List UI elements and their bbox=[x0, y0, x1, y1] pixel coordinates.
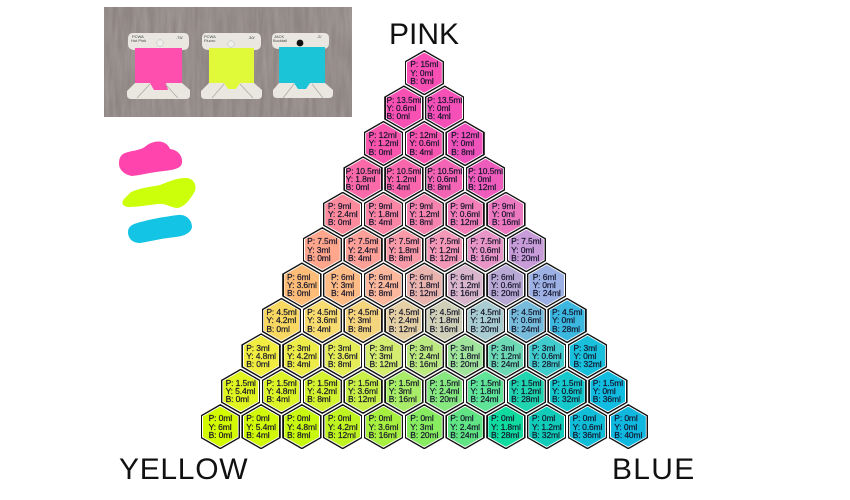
hexagon mixing triangle: Y: 1.8ml bbox=[470, 386, 500, 396]
swatches: painted pink, yellow and blue blobs bbox=[119, 142, 196, 243]
hexagon mixing triangle: P: 10.5ml bbox=[386, 166, 421, 176]
hexagon mixing triangle: B: 16ml bbox=[409, 359, 437, 369]
hexagon mixing triangle: P: 6ml bbox=[331, 272, 354, 282]
hex row 6 bbox=[303, 227, 342, 272]
hex row 11: P: 0ml bbox=[209, 413, 232, 423]
hexagon mixing triangle: P: 7.5ml bbox=[430, 236, 460, 246]
hexagon mixing triangle: B: 4ml bbox=[246, 430, 270, 440]
hex row 10: Y: 5.4ml bbox=[226, 386, 255, 396]
hexagon mixing triangle: B: 12ml bbox=[389, 324, 417, 334]
hexagon mixing triangle: Y: 1.8ml bbox=[369, 209, 398, 219]
hex row 9: P: 3ml bbox=[246, 343, 270, 353]
hexagon mixing triangle: B: 8ml bbox=[409, 217, 433, 227]
hexagon mixing triangle: Y: 3.6ml bbox=[328, 351, 358, 361]
hexagon mixing triangle: Y: 1.2ml bbox=[386, 174, 416, 184]
hex row 11: Y: 6ml bbox=[209, 422, 232, 432]
hexagon mixing triangle: B: 32ml bbox=[532, 430, 560, 440]
hexagon mixing triangle: B: 24ml bbox=[511, 324, 539, 334]
hex row 1 bbox=[405, 50, 444, 95]
hexagon mixing triangle: P: 9ml bbox=[369, 201, 392, 211]
hex row 5: Y: 2.4ml bbox=[328, 209, 358, 219]
hexagon mixing triangle: P: 7.5ml bbox=[389, 236, 419, 246]
hexagon mixing triangle: P: 1.5ml bbox=[307, 378, 337, 388]
hexagon mixing triangle: B: 8ml bbox=[427, 182, 451, 192]
hexagon mixing triangle: B: 16ml bbox=[389, 394, 417, 404]
hexagon mixing triangle: Y: 0ml bbox=[552, 315, 575, 325]
hexagon mixing triangle: P: 1.5ml bbox=[266, 378, 297, 388]
blue swatch bbox=[128, 215, 192, 243]
hexagon mixing triangle: B: 4ml bbox=[331, 288, 354, 298]
hex row 10: P: 1.5ml bbox=[226, 378, 256, 388]
hexagon mixing triangle: P: 0ml bbox=[614, 413, 638, 423]
hexagon mixing triangle: Y: 0ml bbox=[492, 209, 515, 219]
hexagon mixing triangle: B: 24ml bbox=[491, 359, 519, 369]
hexagon mixing triangle: P: 9ml bbox=[492, 201, 515, 211]
hexagon mixing triangle: B: 28ml bbox=[491, 430, 519, 440]
hex row 4: B: 0ml bbox=[346, 182, 369, 192]
hexagon mixing triangle: Y: 3ml bbox=[370, 351, 392, 361]
hexagon mixing triangle: Y: 0.6ml bbox=[552, 386, 582, 396]
hex row 4: P: 10.5ml bbox=[346, 166, 380, 176]
hexagon mixing triangle: P: 3ml bbox=[287, 343, 310, 353]
hexagon mixing triangle: Y: 1.2ml bbox=[532, 422, 562, 432]
hex row 1: B: 0ml bbox=[410, 76, 434, 86]
heading: blue: BLUE bbox=[612, 453, 696, 486]
hex row 3: B: 0ml bbox=[369, 147, 392, 157]
hexagon mixing triangle: Y: 0.6ml bbox=[511, 315, 541, 325]
hexagon mixing triangle: B: 20ml bbox=[491, 288, 519, 298]
hex row 4: Y: 1.8ml bbox=[346, 174, 375, 184]
hex row 6: Y: 3ml bbox=[307, 245, 330, 255]
hexagon mixing triangle: Y: 3ml bbox=[348, 315, 371, 325]
hexagon mixing triangle bbox=[201, 50, 648, 449]
heading: yellow: YELLOW bbox=[119, 453, 248, 486]
hex row 5: B: 0ml bbox=[328, 217, 351, 227]
hexagon mixing triangle: Y: 0.6ml bbox=[409, 138, 439, 148]
hexagon mixing triangle: B: 8ml bbox=[451, 147, 474, 157]
hexagon mixing triangle: Y: 4.8ml bbox=[266, 386, 296, 396]
hexagon mixing triangle: P: 6ml bbox=[450, 272, 474, 282]
hex row 1: Y: 0ml bbox=[410, 68, 433, 78]
hexagon mixing triangle: P: 0ml bbox=[491, 413, 514, 423]
hex row 9: B: 0ml bbox=[246, 359, 270, 369]
hexagon mixing triangle: B: 8ml bbox=[389, 253, 412, 263]
hexagon mixing triangle: Y: 4.8ml bbox=[287, 422, 317, 432]
hexagon mixing triangle: B: 8ml bbox=[369, 288, 392, 298]
hex row 1: P: 15ml bbox=[410, 59, 438, 69]
photo: three spools of fluorescent thread: Fluoro bbox=[204, 38, 216, 43]
hexagon mixing triangle: B: 4ml bbox=[266, 394, 290, 404]
hexagon mixing triangle: B: 4ml bbox=[307, 324, 331, 334]
hexagon mixing triangle: P: 4.5ml bbox=[552, 307, 582, 317]
hex row 7: P: 6ml bbox=[287, 272, 310, 282]
hexagon mixing triangle: Y: 2.4ml bbox=[450, 422, 480, 432]
hexagon mixing triangle: Y: 0ml bbox=[468, 174, 491, 184]
hex row 2: B: 0ml bbox=[386, 111, 410, 121]
hexagon mixing triangle: P: 1.5ml bbox=[389, 378, 419, 388]
hexagon mixing triangle: B: 24ml bbox=[470, 394, 498, 404]
hexagon mixing triangle: P: 3ml bbox=[409, 343, 433, 353]
hex row 11 bbox=[201, 404, 240, 449]
hexagon mixing triangle: Y: 4.2ml bbox=[328, 422, 358, 432]
hexagon mixing triangle: B: 4ml bbox=[427, 111, 451, 121]
photo: three spools of fluorescent thread: Hot Pink bbox=[131, 38, 146, 43]
hexagon mixing triangle: P: 0ml bbox=[410, 413, 434, 423]
hexagon mixing triangle: P: 1.5ml bbox=[552, 378, 582, 388]
hexagon mixing triangle: Y: 1.2ml bbox=[409, 209, 439, 219]
hexagon mixing triangle: P: 12ml bbox=[409, 130, 437, 140]
hexagon mixing triangle: P: 7.5ml bbox=[511, 236, 541, 246]
hex row 8: Y: 4.2ml bbox=[266, 315, 296, 325]
hexagon mixing triangle: P: 6ml bbox=[533, 272, 556, 282]
hexagon mixing triangle: Y: 0.6ml bbox=[427, 174, 457, 184]
hexagon mixing triangle: B: 4ml bbox=[409, 147, 433, 157]
hexagon mixing triangle: P: 1.5ml bbox=[593, 378, 623, 388]
hexagon mixing triangle: P: 1.5ml bbox=[430, 378, 460, 388]
hexagon mixing triangle: B: 24ml bbox=[450, 430, 478, 440]
hexagon mixing triangle: P: 6ml bbox=[491, 272, 514, 282]
hexagon mixing triangle: P: 4.5ml bbox=[511, 307, 541, 317]
hexagon mixing triangle: B: 16ml bbox=[369, 430, 397, 440]
hexagon mixing triangle: B: 24ml bbox=[533, 288, 561, 298]
hexagon mixing triangle: P: 9ml bbox=[409, 201, 433, 211]
hexagon mixing triangle: P: 3ml bbox=[450, 343, 474, 353]
hexagon mixing triangle: Y: 0.6ml bbox=[470, 245, 500, 255]
photo: three spools of fluorescent thread: .75/ bbox=[176, 35, 184, 40]
hexagon mixing triangle: Y: 1.8ml bbox=[430, 315, 459, 325]
hexagon mixing triangle: B: 28ml bbox=[552, 324, 580, 334]
hexagon mixing triangle: Y: 3ml bbox=[331, 280, 354, 290]
hexagon mixing triangle: B: 16ml bbox=[430, 324, 458, 334]
hexagon mixing triangle: B: 32ml bbox=[552, 394, 580, 404]
hexagon mixing triangle: P: 0ml bbox=[328, 413, 351, 423]
photo: three spools of fluorescent thread: PCWA bbox=[132, 34, 144, 39]
hexagon mixing triangle: P: 4.5ml bbox=[430, 307, 460, 317]
hexagon mixing triangle: B: 8ml bbox=[328, 359, 351, 369]
hexagon mixing triangle: Y: 2.4ml bbox=[369, 280, 398, 290]
hexagon mixing triangle: Y: 1.8ml bbox=[409, 280, 439, 290]
hexagon mixing triangle: B: 12ml bbox=[468, 182, 496, 192]
hexagon mixing triangle: B: 16ml bbox=[470, 253, 498, 263]
hexagon mixing triangle: P: 0ml bbox=[532, 413, 555, 423]
hex row 3: P: 12ml bbox=[369, 130, 397, 140]
hex row 10 bbox=[221, 369, 260, 414]
hexagon mixing triangle: Y: 1.2ml bbox=[511, 386, 541, 396]
hexagon mixing triangle: B: 16ml bbox=[450, 288, 478, 298]
hexagon mixing triangle: P: 1.5ml bbox=[470, 378, 501, 388]
hexagon mixing triangle: P: 1.5ml bbox=[348, 378, 378, 388]
hexagon mixing triangle: B: 36ml bbox=[593, 394, 621, 404]
hexagon mixing triangle: Y: 1.8ml bbox=[491, 422, 521, 432]
hexagon mixing triangle: Y: 5.4ml bbox=[246, 422, 276, 432]
photo: three spools of fluorescent thread: Bucktail bbox=[273, 38, 287, 43]
hex row 11: B: 0ml bbox=[209, 430, 232, 440]
hex row 2: P: 13.5ml bbox=[386, 95, 421, 105]
hexagon mixing triangle: P: 6ml bbox=[409, 272, 433, 282]
hexagon mixing triangle: Y: 1.2ml bbox=[450, 280, 480, 290]
hexagon mixing triangle: B: 20ml bbox=[470, 324, 498, 334]
hexagon mixing triangle: Y: 3ml bbox=[389, 386, 412, 396]
hexagon mixing triangle: P: 4.5ml bbox=[348, 307, 378, 317]
hexagon mixing triangle: Y: 0ml bbox=[451, 138, 474, 148]
hexagon mixing triangle: Y: 0.6ml bbox=[532, 351, 562, 361]
hexagon mixing triangle: Y: 4.2ml bbox=[287, 351, 317, 361]
hex row 3: Y: 1.2ml bbox=[369, 138, 398, 148]
hexagon mixing triangle: B: 8ml bbox=[348, 324, 371, 334]
yellow swatch bbox=[122, 178, 196, 208]
hexagon mixing triangle: Y: 2.4ml bbox=[389, 315, 419, 325]
hexagon mixing triangle: Y: 3.6ml bbox=[369, 422, 398, 432]
hexagon mixing triangle: Y: 3.6ml bbox=[307, 315, 337, 325]
hexagon mixing triangle: Y: 0ml bbox=[593, 386, 616, 396]
hex row 7 bbox=[282, 262, 322, 308]
hex row 5 bbox=[323, 192, 362, 237]
hexagon mixing triangle: B: 8ml bbox=[287, 430, 310, 440]
hexagon mixing triangle: Y: 2.4ml bbox=[348, 245, 378, 255]
hexagon mixing triangle: Y: 3.6ml bbox=[348, 386, 378, 396]
hexagon mixing triangle: P: 7.5ml bbox=[470, 236, 501, 246]
hexagon mixing triangle: P: 0ml bbox=[246, 413, 270, 423]
hexagon mixing triangle: B: 12ml bbox=[430, 253, 458, 263]
hexagon mixing triangle: Y: 0.6ml bbox=[573, 422, 602, 432]
hexagon mixing triangle: B: 40ml bbox=[614, 430, 642, 440]
hexagon mixing triangle: Y: 1.2ml bbox=[470, 315, 500, 325]
hexagon mixing triangle: B: 16ml bbox=[492, 217, 520, 227]
photo: three spools of fluorescent thread bbox=[104, 7, 352, 117]
hexagon mixing triangle: Y: 0ml bbox=[511, 245, 534, 255]
hexagon mixing triangle: P: 0ml bbox=[450, 413, 474, 423]
hexagon mixing triangle: Y: 0.6ml bbox=[450, 209, 480, 219]
hexagon mixing triangle: B: 20ml bbox=[410, 430, 438, 440]
hexagon mixing triangle: Y: 1.2ml bbox=[491, 351, 521, 361]
photo: three spools of fluorescent thread: .30/ bbox=[248, 35, 256, 40]
hexagon mixing triangle: P: 0ml bbox=[573, 413, 596, 423]
photo: three spools of fluorescent thread: PCWA bbox=[204, 34, 216, 39]
hex row 8 bbox=[262, 298, 301, 343]
hexagon mixing triangle: P: 0ml bbox=[369, 413, 392, 423]
hexagon mixing triangle: P: 3ml bbox=[491, 343, 514, 353]
hexagon mixing triangle: Y: 2.4ml bbox=[430, 386, 459, 396]
hexagon mixing triangle: P: 4.5ml bbox=[307, 307, 337, 317]
hexagon mixing triangle: P: 3ml bbox=[574, 343, 597, 353]
hexagon mixing triangle: P: 1.5ml bbox=[511, 378, 541, 388]
hexagon mixing triangle: B: 32ml bbox=[574, 359, 601, 369]
hex row 6: P: 7.5ml bbox=[307, 236, 337, 246]
hexagon mixing triangle: P: 3ml bbox=[532, 343, 555, 353]
hexagon mixing triangle: P: 10.5ml bbox=[427, 166, 462, 176]
hexagon mixing triangle: B: 12ml bbox=[328, 430, 356, 440]
hexagon mixing triangle: P: 4.5ml bbox=[470, 307, 501, 317]
hexagon mixing triangle: Y: 3ml bbox=[410, 422, 433, 432]
hexagon mixing triangle: P: 13.5ml bbox=[427, 95, 462, 105]
hex row 10: B: 0ml bbox=[226, 394, 249, 404]
hexagon mixing triangle: B: 20ml bbox=[450, 359, 478, 369]
hex row 7: B: 0ml bbox=[287, 288, 310, 298]
hex row 7: Y: 3.6ml bbox=[287, 280, 317, 290]
hex row 9: Y: 4.8ml bbox=[246, 351, 276, 361]
hexagon mixing triangle: Y: 4.2ml bbox=[307, 386, 337, 396]
hexagon mixing triangle: Y: 0ml bbox=[427, 103, 450, 113]
hexagon mixing triangle: P: 9ml bbox=[450, 201, 474, 211]
hexagon mixing triangle: B: 20ml bbox=[430, 394, 458, 404]
hexagon mixing triangle: Y: 1.8ml bbox=[389, 245, 419, 255]
hex row 2 bbox=[384, 85, 424, 131]
hexagon mixing triangle: B: 28ml bbox=[532, 359, 560, 369]
hexagon mixing triangle: B: 12ml bbox=[370, 359, 397, 369]
hexagon mixing triangle: P: 6ml bbox=[369, 272, 392, 282]
hex row 8: B: 0ml bbox=[266, 324, 290, 334]
hexagon mixing triangle: P: 3ml bbox=[370, 343, 393, 353]
hexagon mixing triangle: P: 7.5ml bbox=[348, 236, 378, 246]
hexagon mixing triangle: Y: 0.6ml bbox=[491, 280, 521, 290]
hex row 9 bbox=[241, 333, 281, 379]
hexagon mixing triangle: B: 20ml bbox=[511, 253, 539, 263]
hexagon mixing triangle: P: 4.5ml bbox=[389, 307, 419, 317]
hexagon mixing triangle: B: 28ml bbox=[511, 394, 539, 404]
hexagon mixing triangle: Y: 0ml bbox=[533, 280, 556, 290]
hexagon mixing triangle: P: 0ml bbox=[287, 413, 310, 423]
pink swatch bbox=[119, 141, 182, 176]
hexagon mixing triangle: B: 4ml bbox=[348, 253, 371, 263]
hexagon mixing triangle: P: 10.5ml bbox=[468, 166, 503, 176]
hexagon mixing triangle: Y: 1.2ml bbox=[430, 245, 459, 255]
hexagon mixing triangle: P: 3ml bbox=[328, 343, 351, 353]
hexagon mixing triangle: B: 4ml bbox=[287, 359, 310, 369]
hex row 5: P: 9ml bbox=[328, 201, 351, 211]
hexagon mixing triangle: B: 4ml bbox=[386, 182, 410, 192]
hexagon mixing triangle: P: 12ml bbox=[451, 130, 479, 140]
hexagon mixing triangle: B: 12ml bbox=[450, 217, 478, 227]
hexagon mixing triangle: B: 4ml bbox=[369, 217, 392, 227]
hexagon mixing triangle: Y: 0ml bbox=[574, 351, 596, 361]
heading: pink: PINK bbox=[389, 18, 459, 51]
hexagon mixing triangle: Y: 1.8ml bbox=[450, 351, 480, 361]
hexagon mixing triangle: Y: 0ml bbox=[614, 422, 637, 432]
hexagon mixing triangle: B: 12ml bbox=[409, 288, 437, 298]
hexagon mixing triangle: B: 36ml bbox=[573, 430, 601, 440]
hex row 8: P: 4.5ml bbox=[266, 307, 297, 317]
hex row 4 bbox=[343, 156, 383, 202]
photo: three spools of fluorescent thread: .2/ bbox=[317, 34, 322, 39]
hex row 6: B: 0ml bbox=[307, 253, 331, 263]
hexagon mixing triangle: Y: 2.4ml bbox=[409, 351, 439, 361]
photo: three spools of fluorescent thread: JACK bbox=[274, 34, 285, 39]
hexagon mixing triangle: B: 12ml bbox=[348, 394, 376, 404]
hexagon mixing triangle: B: 8ml bbox=[307, 394, 331, 404]
hex row 3 bbox=[364, 121, 403, 166]
hex row 2: Y: 0.6ml bbox=[386, 103, 416, 113]
